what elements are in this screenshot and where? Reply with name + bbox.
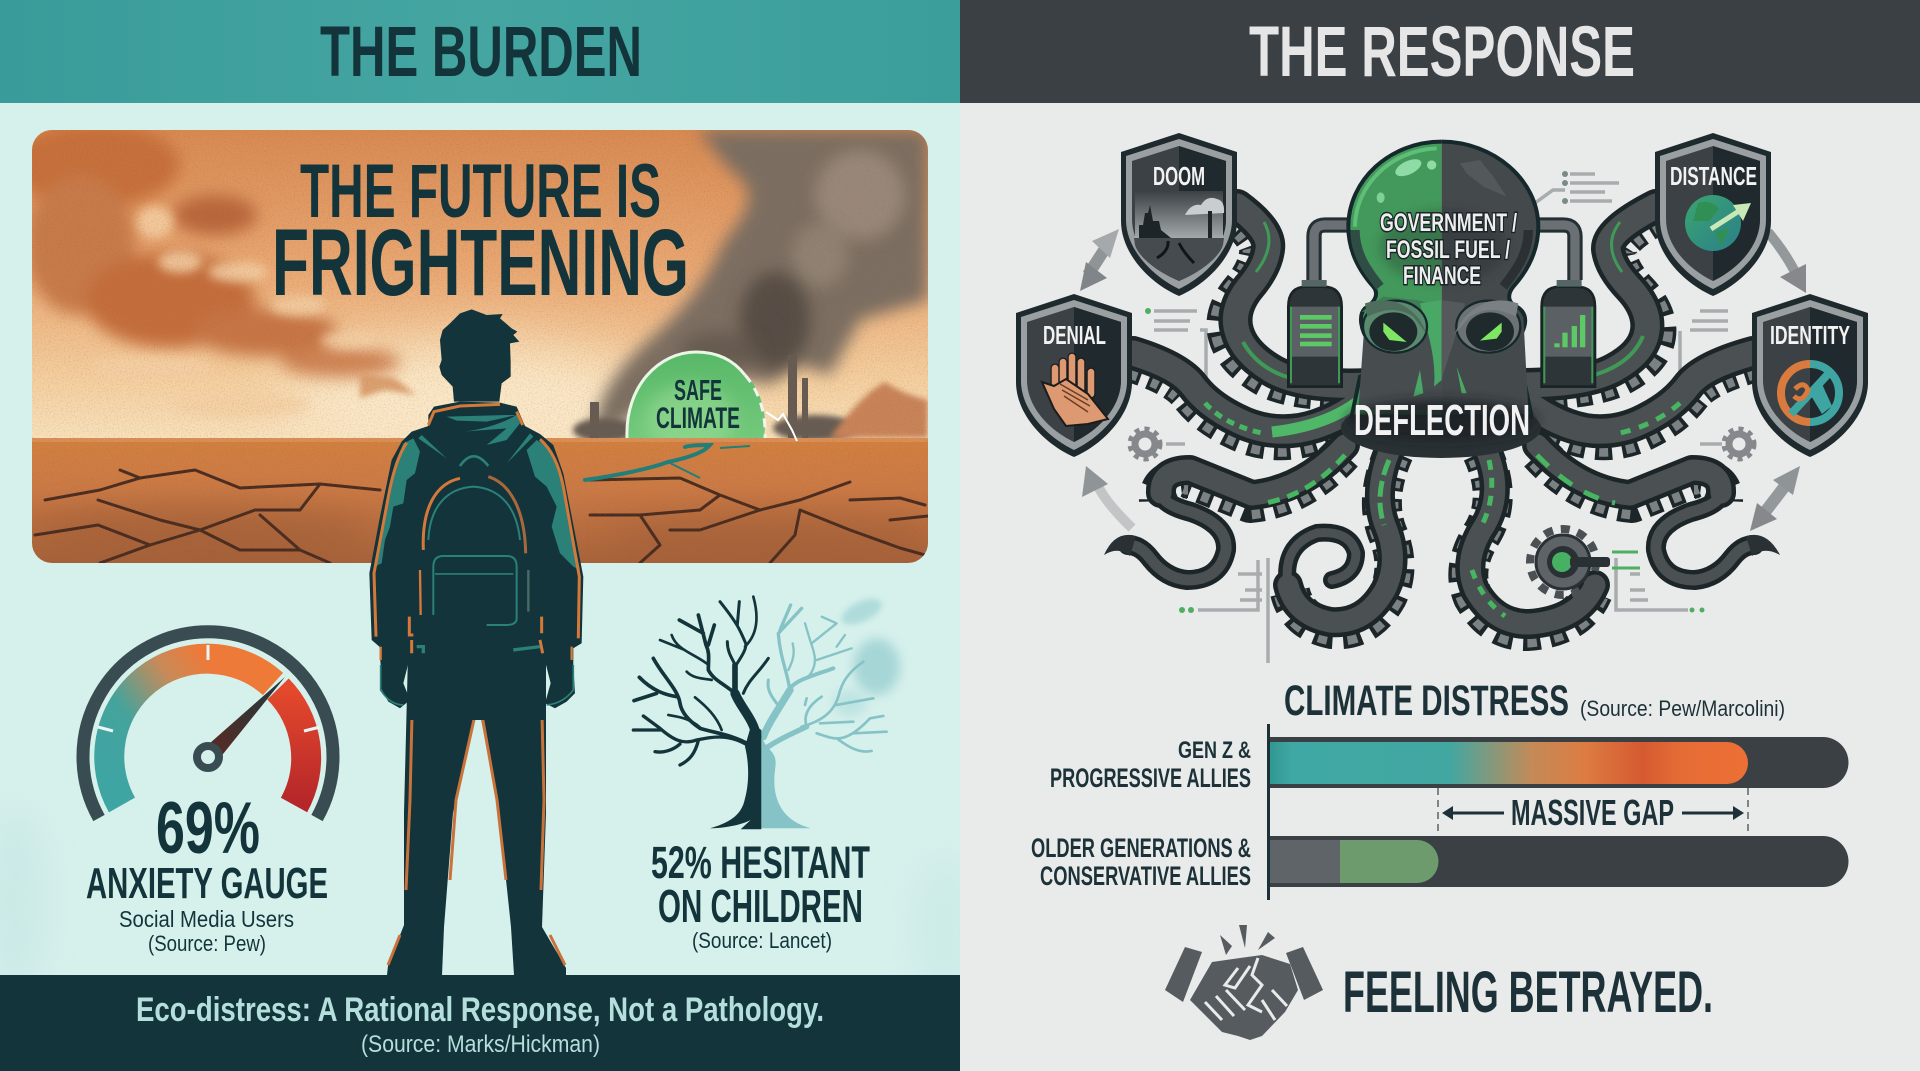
headline: the future is frightening [272, 149, 689, 316]
head label [1380, 209, 1517, 290]
deflection label: DEFLECTION [1354, 396, 1530, 445]
gauge value and labels [86, 788, 328, 956]
safe climate dome: CLIMATE [656, 402, 740, 435]
gauge value and labels: (Source: Pew) [148, 931, 266, 956]
panel: the response (right half) [960, 0, 1920, 1071]
ground [32, 438, 928, 563]
shield: doom: DOOM [1153, 161, 1205, 191]
bar: gen z and progressive allies [1050, 737, 1848, 793]
chart: climate distress [1031, 677, 1848, 900]
ground cracks [35, 470, 928, 563]
octopus diagram [1016, 133, 1868, 663]
icon: half-dead tree [633, 593, 900, 953]
background tech annotations [1154, 174, 1728, 663]
upper body [369, 309, 583, 720]
factory silhouette on horizon [573, 355, 857, 442]
smoke right [592, 130, 928, 438]
shield: denial [1016, 294, 1132, 457]
shield: denial: DENIAL [1043, 320, 1106, 350]
cycle arrows between shields [1080, 229, 1806, 531]
head label: FOSSIL FUEL / [1386, 236, 1510, 264]
footer source: (Source: Marks/Hickman) [361, 1031, 600, 1058]
panel: the burden (left half) [0, 0, 975, 1071]
arm outlines [1128, 206, 1754, 624]
head label: GOVERNMENT / [1380, 209, 1517, 237]
dark half [633, 597, 768, 765]
left header band [0, 0, 960, 103]
gauge value and labels: ANXIETY GAUGE [86, 859, 328, 908]
massive gap annotation: MASSIVE GAP [1511, 792, 1674, 833]
chart title: CLIMATE DISTRESS [1284, 677, 1569, 725]
safe climate dome: SAFE [674, 375, 722, 407]
octopus head [1341, 142, 1541, 458]
shield: identity: IDENTITY [1770, 320, 1850, 350]
headline: the future is frightening: FRIGHTENING [272, 210, 689, 316]
pipes and canisters [1288, 225, 1595, 387]
bar: older generations and conservative allies: CONSERVATIVE ALLIES [1040, 861, 1251, 891]
heading: the burden: THE BURDEN [320, 13, 642, 92]
eyes [1363, 300, 1520, 353]
shield: identity [1752, 294, 1868, 457]
suckers [1130, 211, 1756, 631]
tree caption [651, 837, 870, 953]
shield: distance [1655, 133, 1771, 296]
gauge value and labels: Social Media Users [119, 906, 294, 932]
safe climate dome [625, 350, 798, 442]
footer statement: Eco-distress: A Rational Response, Not a Pathology. [136, 991, 824, 1029]
shield: distance: DISTANCE [1670, 161, 1757, 191]
chart axis [1267, 724, 1270, 900]
tree caption: ON CHILDREN [658, 880, 863, 932]
clouds left [10, 123, 400, 377]
lower gear mechanism [1530, 529, 1640, 595]
green crack to the safe dome [585, 445, 710, 480]
bar: gen z and progressive allies: PROGRESSIVE ALLIES [1050, 763, 1251, 793]
heading: the response: THE RESPONSE [1249, 13, 1635, 92]
shield: doom [1121, 133, 1237, 296]
octopus arms [1104, 206, 1780, 631]
tree caption: (Source: Lancet) [692, 928, 832, 953]
light half [763, 605, 887, 752]
arm bodies [1128, 206, 1754, 624]
gauge value and labels: 69% [156, 788, 260, 869]
green circuit accents [1205, 222, 1680, 616]
tree caption: 52% HESITANT [651, 837, 870, 888]
head label: FINANCE [1403, 262, 1481, 290]
claw tips [1104, 535, 1780, 556]
right header band [960, 0, 1920, 103]
bar: gen z and progressive allies: GEN Z & [1178, 737, 1251, 764]
footer band [0, 975, 960, 1071]
figure: person with backpack [369, 309, 583, 975]
headline: the future is frightening: THE FUTURE IS [300, 149, 661, 234]
massive gap annotation [1438, 788, 1748, 836]
chart source: (Source: Pew/Marcolini) [1580, 696, 1785, 721]
legs and boots [387, 655, 566, 975]
icon: broken handshake [1165, 925, 1323, 1040]
gauge: anxiety 69% [83, 632, 333, 956]
icon: small gears [1130, 429, 1754, 459]
bar: older generations and conservative allies: OLDER GENERATIONS & [1031, 833, 1251, 863]
illustration: desert scene [10, 123, 930, 563]
bar: older generations and conservative allies [1031, 833, 1848, 891]
